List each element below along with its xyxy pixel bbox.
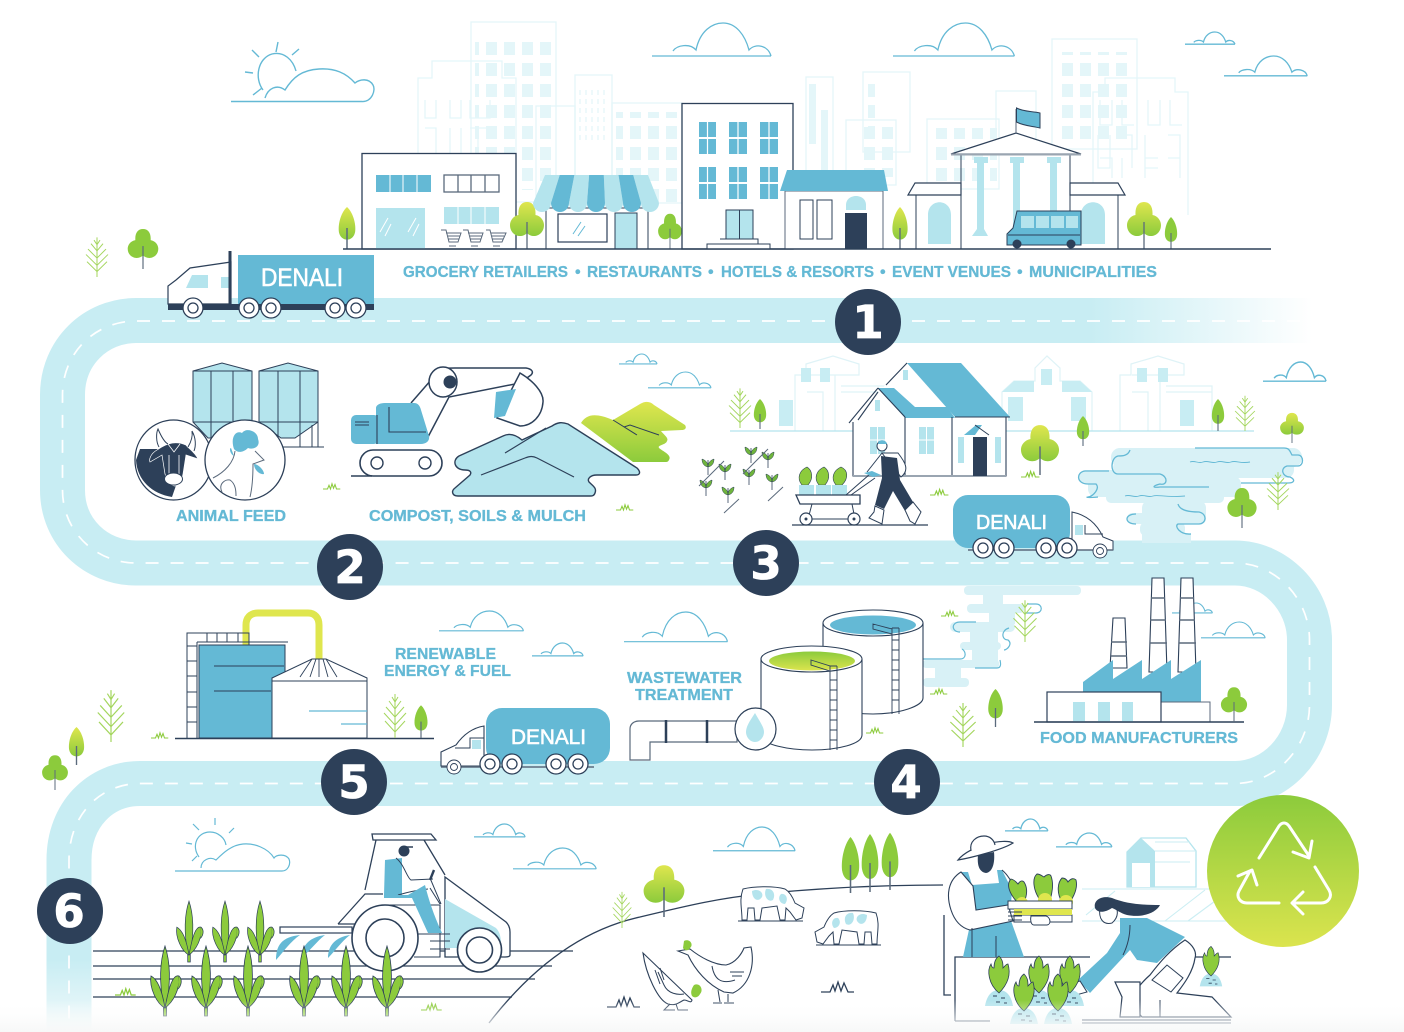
sun and cloud [175,818,290,871]
scene: animal feed [135,363,340,525]
cow [815,911,881,945]
hotel [682,104,793,249]
clouds [474,824,596,869]
shopping carts [441,230,506,246]
driver [384,846,442,933]
plants [866,600,1037,747]
front tank [761,646,862,750]
label: renewable energy and fuel: ENERGY & FUEL [384,663,511,680]
farmer with cart [792,440,928,525]
step 1 marker: 1 [852,296,884,349]
label: wastewater treatment: WASTEWATER [627,670,742,687]
scene: city skyline background [418,22,1188,215]
step 6 marker [37,878,103,944]
back tank [823,610,923,714]
grass [616,505,633,510]
tree [1127,202,1161,249]
lower stream [923,586,1081,687]
tree [892,207,908,249]
sweater [1078,918,1185,993]
silos [193,363,324,447]
cloud [713,827,795,851]
step 1 marker [835,289,901,355]
label: wastewater treatment [627,670,742,704]
excavator [351,367,543,476]
label: customers: • [880,264,886,281]
step 4 marker [874,749,940,815]
plants [42,690,428,790]
hill [489,885,943,1023]
recycling badge [1207,795,1359,947]
road: winding route [62,320,1314,1032]
bus [1007,211,1081,248]
scene: city foreground [339,104,1271,249]
tree [658,214,682,249]
decorative trees: upper left [86,229,158,277]
truck 5 [441,708,610,774]
clouds [439,611,583,656]
step 4 marker: 4 [890,756,922,809]
step 5 marker: 5 [338,756,370,809]
pond [1079,448,1302,543]
label: wastewater treatment: TREATMENT [635,687,733,704]
truck 3 [953,495,1113,558]
icon: recycle arrows [1238,823,1330,914]
label: renewable energy and fuel [384,646,511,680]
bush [1221,687,1247,722]
museum with columns and flag [908,108,1125,249]
green mound [581,402,686,462]
clouds [619,354,711,388]
step 3 marker: 3 [750,537,782,590]
tree [339,207,355,249]
label: customers: RESTAURANTS [587,264,702,281]
fern [86,237,108,277]
factory [1034,578,1244,722]
water stream over roads [923,448,1302,687]
bottom fade [0,1000,1404,1032]
label: customers: HOTELS & RESORTS [721,264,874,281]
label: animal feed: ANIMAL FEED [176,508,286,525]
scene: residential farm [699,356,1326,558]
step 5 marker [321,749,387,815]
trees [729,388,1304,528]
vegetable crate [1008,874,1077,925]
label: customers: • [1017,264,1023,281]
field lines [93,951,573,997]
clouds [1005,819,1112,847]
label: compost: COMPOST, SOILS & MULCH [369,508,586,525]
truck 5: DENALI [511,726,586,749]
seedlings [699,447,783,513]
label: customers: MUNICIPALITIES [1029,264,1157,281]
label: customers: EVENT VENUES [892,264,1011,281]
scene: crop field with tractor [93,818,596,1016]
trees [613,833,898,928]
scene: food manufacturers [1034,578,1265,747]
label: food manufacturers: FOOD MANUFACTURERS [1040,730,1238,747]
tree [510,202,544,249]
grocery building [362,154,516,249]
cloud and sun: top left [231,42,374,102]
chicken left [643,953,702,1010]
grass [323,484,340,489]
label: renewable energy and fuel: RENEWABLE [395,646,496,663]
label: customers [403,264,1157,281]
truck 1 [168,251,374,318]
farmer with crate [948,836,1077,957]
clouds: top [652,23,1307,76]
bush [128,229,158,269]
shop with awning [533,175,659,249]
label: customers: • [708,264,714,281]
truck 1: DENALI [261,264,343,292]
step 3 marker [733,530,799,596]
scene: wastewater treatment [624,600,1037,760]
cow [738,887,804,921]
truck 3: DENALI [976,512,1047,534]
label: customers: • [575,264,581,281]
scene: compost, soils and mulch [351,354,711,525]
plow [276,927,352,960]
cloud [624,612,728,642]
pipe with water drop [630,708,776,760]
compost pile [453,423,640,496]
digester tanks [175,613,434,738]
step 6 marker: 6 [53,885,85,938]
label: customers: GROCERY RETAILERS [403,264,568,281]
legs [1130,940,1231,1017]
main house [848,363,1010,476]
faint houses [730,356,1254,431]
grass [115,989,442,1010]
scene: renewable energy and fuel [42,611,610,790]
cow circle [135,420,212,500]
tree [1165,217,1177,249]
clouds [1172,603,1265,638]
scene: community garden [944,819,1231,1024]
tractor [276,834,510,972]
cloud [1263,362,1326,381]
ground line [343,248,1271,250]
corn rows [151,901,403,1016]
barn and field [1082,838,1230,921]
garden bed lines [944,915,1231,1023]
blue roof house [780,170,888,249]
grass tufts [607,982,854,1007]
lettuce plants [985,946,1222,1024]
scene: pasture [489,827,943,1023]
chicken circle [205,420,285,500]
woman gardening [1062,897,1231,1017]
chicken right [678,940,752,1003]
step 2 marker: 2 [334,541,366,594]
step 2 marker [317,534,383,600]
